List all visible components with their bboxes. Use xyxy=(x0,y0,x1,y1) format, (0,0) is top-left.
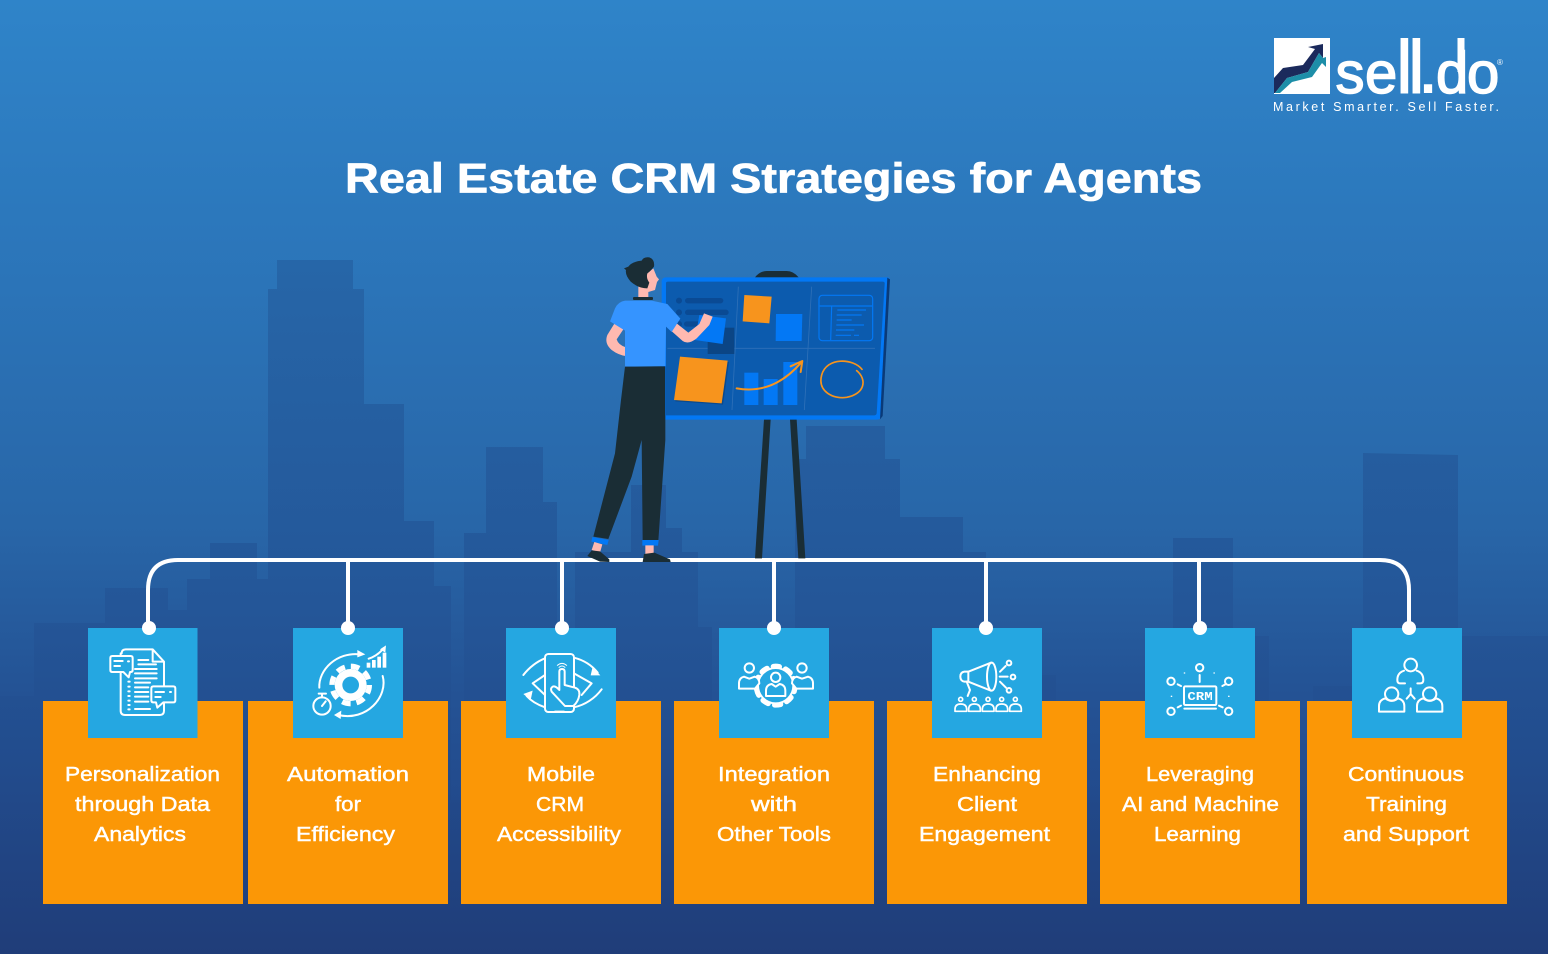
icon tile xyxy=(1145,628,1255,738)
left arm xyxy=(606,323,626,356)
orange panel xyxy=(248,701,448,904)
connector dot xyxy=(979,621,993,635)
collar xyxy=(633,297,653,300)
card text: through Data xyxy=(75,793,211,816)
shirt xyxy=(610,301,680,367)
right arm xyxy=(671,313,713,342)
card text xyxy=(1343,763,1469,846)
card text: Accessibility xyxy=(497,823,622,846)
card 4: integration xyxy=(674,621,874,904)
logo wordmark xyxy=(1336,25,1499,109)
card text: AI and Machine xyxy=(1122,793,1279,816)
orange panel xyxy=(887,701,1087,904)
cuffs xyxy=(591,537,659,546)
card text xyxy=(497,763,622,846)
card text xyxy=(717,763,831,846)
card text: Learning xyxy=(1154,823,1241,846)
illustration: presenter at board xyxy=(587,257,890,562)
card text: Training xyxy=(1366,793,1447,816)
logo wordmark: d xyxy=(1436,41,1468,106)
card 2: automation xyxy=(248,621,448,904)
icon tile xyxy=(932,628,1042,738)
logo wordmark: s xyxy=(1336,41,1364,106)
trousers xyxy=(593,366,665,541)
icon tile xyxy=(293,628,403,738)
card text: Analytics xyxy=(94,823,186,846)
easel legs xyxy=(755,419,805,558)
card text: Enhancing xyxy=(933,763,1041,786)
orange panel xyxy=(43,701,243,904)
blue square note xyxy=(776,314,802,341)
orange panel xyxy=(1307,701,1507,904)
blue note xyxy=(695,315,726,344)
small orange note xyxy=(743,295,772,323)
card text: Integration xyxy=(718,763,830,786)
card text: Personalization xyxy=(65,763,220,786)
connector dot xyxy=(142,621,156,635)
icon: gear with arrows xyxy=(313,645,386,719)
board list xyxy=(676,298,729,327)
logo wordmark: . xyxy=(1420,41,1436,106)
logo icon xyxy=(1274,38,1330,94)
registered mark: ® xyxy=(1497,58,1503,67)
card 6: AI xyxy=(1100,621,1300,904)
card text: Mobile xyxy=(527,763,595,786)
icon tile xyxy=(88,628,198,738)
card text: Other Tools xyxy=(717,823,831,846)
icon: phone, eye and hand xyxy=(523,654,602,712)
connector dot xyxy=(767,621,781,635)
card text: with xyxy=(750,793,797,816)
connector dot xyxy=(555,621,569,635)
icon tile xyxy=(719,628,829,738)
card text: Efficiency xyxy=(296,823,396,846)
city skyline silhouette xyxy=(0,260,1548,954)
card text: Engagement xyxy=(919,823,1050,846)
icon: team and gear xyxy=(739,663,813,705)
card text: Client xyxy=(957,793,1017,816)
logo wordmark: l xyxy=(1396,25,1413,109)
card 7: training xyxy=(1307,621,1507,904)
card text xyxy=(65,763,220,846)
icon: group of people xyxy=(1379,659,1442,712)
icon: CRM network xyxy=(1167,664,1232,715)
logo tagline: Market Smarter. Sell Faster. xyxy=(1273,100,1499,114)
icon tile xyxy=(506,628,616,738)
icon: megaphone and audience xyxy=(955,661,1021,711)
card text: Leveraging xyxy=(1146,763,1254,786)
board xyxy=(662,277,890,420)
card text xyxy=(919,763,1050,846)
large orange note xyxy=(675,358,729,405)
orange panel xyxy=(1100,701,1300,904)
card 5: engagement xyxy=(887,621,1087,904)
neck and face xyxy=(638,268,659,299)
board trend arrow xyxy=(737,361,802,389)
shoes xyxy=(587,550,671,562)
board bar chart xyxy=(744,362,797,405)
card text xyxy=(1122,763,1279,846)
icon: documents and chat xyxy=(110,649,175,715)
logo: sell.do xyxy=(1273,25,1503,114)
card text: Continuous xyxy=(1348,763,1464,786)
title: Real Estate CRM Strategies for Agents xyxy=(345,154,1202,202)
card text xyxy=(287,763,409,846)
board table icon xyxy=(819,295,873,341)
logo wordmark: l xyxy=(1408,25,1425,109)
connector dot xyxy=(341,621,355,635)
note shadow xyxy=(708,328,734,354)
logo wordmark: e xyxy=(1365,41,1397,106)
person xyxy=(587,257,713,562)
card text: CRM xyxy=(536,793,584,816)
ankles xyxy=(592,542,654,554)
card text: and Support xyxy=(1343,823,1469,846)
card text: for xyxy=(335,793,361,816)
hair xyxy=(624,257,654,288)
card 3: mobile xyxy=(461,621,661,904)
card 1: personalization xyxy=(43,621,243,904)
orange panel xyxy=(461,701,661,904)
orange panel xyxy=(674,701,874,904)
logo wordmark: o xyxy=(1467,41,1499,106)
icon tile xyxy=(1352,628,1462,738)
connector dot xyxy=(1402,621,1416,635)
board handle xyxy=(755,271,799,277)
CRM label: CRM xyxy=(1187,690,1213,704)
board hand-drawn circle xyxy=(821,361,863,398)
connector dot xyxy=(1193,621,1207,635)
connector lines xyxy=(148,560,1409,628)
card text: Automation xyxy=(287,763,409,786)
